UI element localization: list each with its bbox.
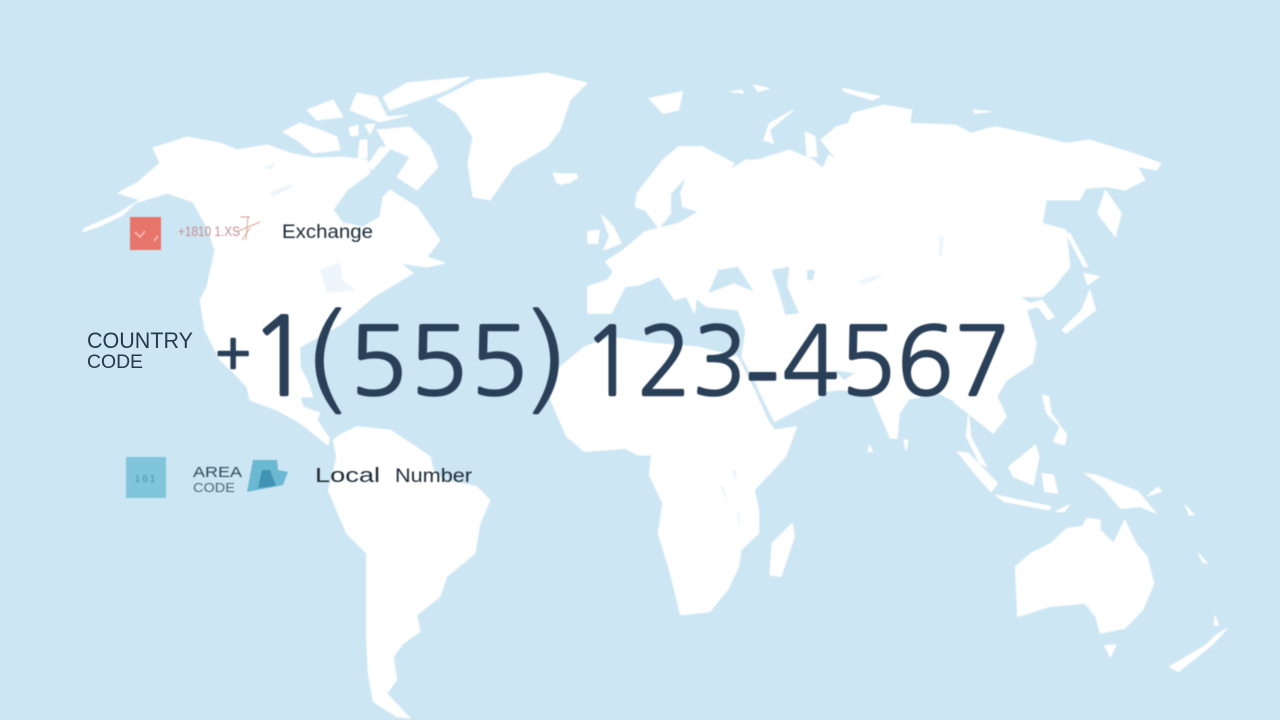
local number label [315, 465, 473, 487]
phone number: + [215, 327, 251, 383]
phone number: - [744, 330, 780, 430]
sample number: +1810 1.XS [178, 223, 240, 239]
icon: red square [130, 217, 161, 250]
country code label: COUNTRY [87, 328, 193, 353]
local number label: Number [395, 466, 473, 487]
phone number: ( [303, 305, 343, 415]
phone number: ) [529, 305, 569, 415]
Great Lakes and inland water [263, 162, 357, 293]
Africa, Arabia, South Asia and Oceania [547, 337, 1227, 672]
phone number [215, 303, 1011, 430]
Eurasia [560, 85, 1161, 400]
area code label: AREA [193, 464, 242, 481]
African lakes and pale inland water [720, 237, 1090, 613]
icon: squiggle [236, 216, 260, 240]
North America [82, 73, 587, 445]
inland seas [708, 267, 854, 380]
legend row: area code and local number [126, 457, 473, 498]
phone number: 123 [582, 314, 747, 409]
phone number: 4567 [782, 314, 1011, 409]
phone number: 555 [348, 314, 529, 409]
area code label [193, 464, 242, 495]
legend row: exchange [130, 216, 373, 250]
local number label: Local [315, 465, 380, 487]
country code label: CODE [87, 352, 143, 373]
country code label [87, 328, 193, 373]
icon: folded map [247, 460, 288, 492]
icon: teal square [126, 457, 166, 498]
South America [328, 427, 490, 718]
area code label: CODE [193, 480, 235, 495]
exchange label: Exchange [282, 222, 373, 243]
phone number: 1 [248, 303, 313, 411]
icon: teal square: 161 [135, 474, 157, 485]
